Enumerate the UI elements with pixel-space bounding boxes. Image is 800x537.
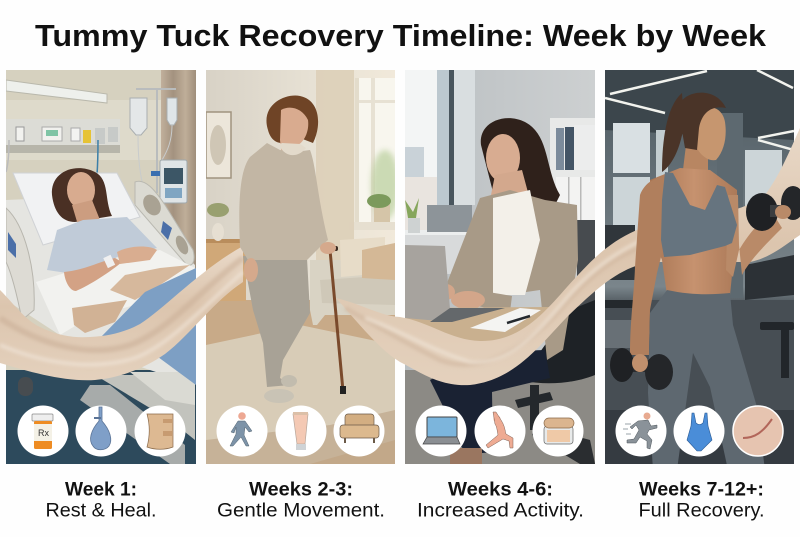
sideboard with vase <box>206 203 246 301</box>
caption: weeks 2-3 <box>217 478 385 522</box>
caption: weeks 4-6 <box>417 478 584 522</box>
ceiling lights <box>605 70 794 150</box>
ceiling light <box>6 80 107 103</box>
ceiling beams <box>605 89 794 140</box>
icon: prescription bottle: Rx <box>38 428 49 438</box>
sports bra <box>661 172 737 257</box>
icons: weeks 4-6 <box>416 406 584 456</box>
icon: compression binder <box>134 406 186 456</box>
face and neck <box>280 108 308 158</box>
walking cane <box>323 246 346 394</box>
icon: scar cream tube <box>276 406 326 456</box>
trousers <box>243 256 310 387</box>
caption: weeks 7-12+: Weeks 7-12+: <box>639 478 764 500</box>
caption: weeks 2-3: Weeks 2-3: <box>249 478 353 500</box>
icons: week 1 <box>18 406 186 456</box>
caption: week 1 <box>46 478 156 522</box>
icon: prescription bottle <box>18 406 68 456</box>
rug <box>206 325 395 464</box>
caption: weeks 4-6: Increased Activity. <box>417 500 584 522</box>
windows <box>613 113 782 298</box>
desk <box>406 307 548 341</box>
wall service panel <box>6 119 120 175</box>
title: Tummy Tuck Recovery Timeline: Week by Week <box>35 18 767 53</box>
window <box>355 78 395 230</box>
icon: healed scar close-up <box>733 406 783 456</box>
framed picture <box>206 112 231 178</box>
icon: walking figure <box>216 406 268 456</box>
caption: weeks 7-12+ <box>638 478 764 522</box>
hair <box>678 93 726 150</box>
raised forearm <box>726 195 782 277</box>
hair <box>266 96 318 143</box>
caption: week 1: Week 1: <box>65 478 137 500</box>
flowing fabric ribbon right <box>336 128 800 385</box>
office window <box>405 70 475 230</box>
panel: week 7-12 gym background <box>605 70 794 464</box>
clipboard and pen <box>470 308 541 332</box>
woman seated at laptop <box>430 118 578 464</box>
torso <box>650 168 738 295</box>
blue blanket <box>100 268 196 385</box>
leggings <box>648 290 765 470</box>
raised dumbbell <box>746 186 800 231</box>
curtain <box>161 70 196 290</box>
sofa <box>310 237 395 325</box>
icon: yoga pose <box>474 406 526 456</box>
sweater <box>239 143 328 260</box>
pillow <box>13 173 140 245</box>
slippers <box>264 389 294 403</box>
icon: blue swimsuit <box>674 406 724 456</box>
lowered arm <box>630 181 661 355</box>
icon: sofa <box>334 406 384 456</box>
caption: weeks 4-6: Weeks 4-6: <box>448 478 553 500</box>
woman lifting dumbbells <box>610 93 800 470</box>
panel: week 2-3 living room <box>206 70 399 464</box>
face <box>692 107 726 160</box>
caption: week 1: Rest & Heal. <box>46 500 156 522</box>
icons: weeks 7-12 <box>616 406 783 456</box>
hands <box>244 258 258 282</box>
caption: weeks 7-12+: Full Recovery. <box>638 500 764 522</box>
neck <box>683 148 708 170</box>
IV stand and bags <box>130 88 177 195</box>
panel: week 4-6 office <box>405 70 595 464</box>
flowing fabric ribbon left <box>0 246 243 380</box>
curtains <box>316 70 354 260</box>
floor <box>405 370 595 464</box>
office chair <box>515 220 595 464</box>
hospital bed rails and frame <box>6 181 195 464</box>
window sill, plant and papers <box>405 198 475 274</box>
icons: weeks 2-3 <box>216 406 384 456</box>
compression binder <box>72 265 190 333</box>
laptop <box>405 245 505 322</box>
icon: cream jar <box>532 406 584 456</box>
ponytail <box>662 93 684 172</box>
white bed sheet <box>36 250 195 335</box>
icon: drain bulb <box>76 406 126 456</box>
floor <box>206 300 395 464</box>
patient monitor <box>151 160 187 203</box>
icon: laptop <box>416 406 466 456</box>
bookshelf with binders <box>550 118 595 223</box>
lower dumbbell <box>610 348 673 390</box>
patient lying in bed <box>47 168 157 291</box>
woman walking with cane <box>239 96 346 403</box>
icon: running figure <box>616 406 666 456</box>
gym floor and equipment <box>605 225 794 410</box>
caption: weeks 2-3: Gentle Movement. <box>217 500 385 522</box>
panel: week 1 hospital room <box>6 70 196 464</box>
